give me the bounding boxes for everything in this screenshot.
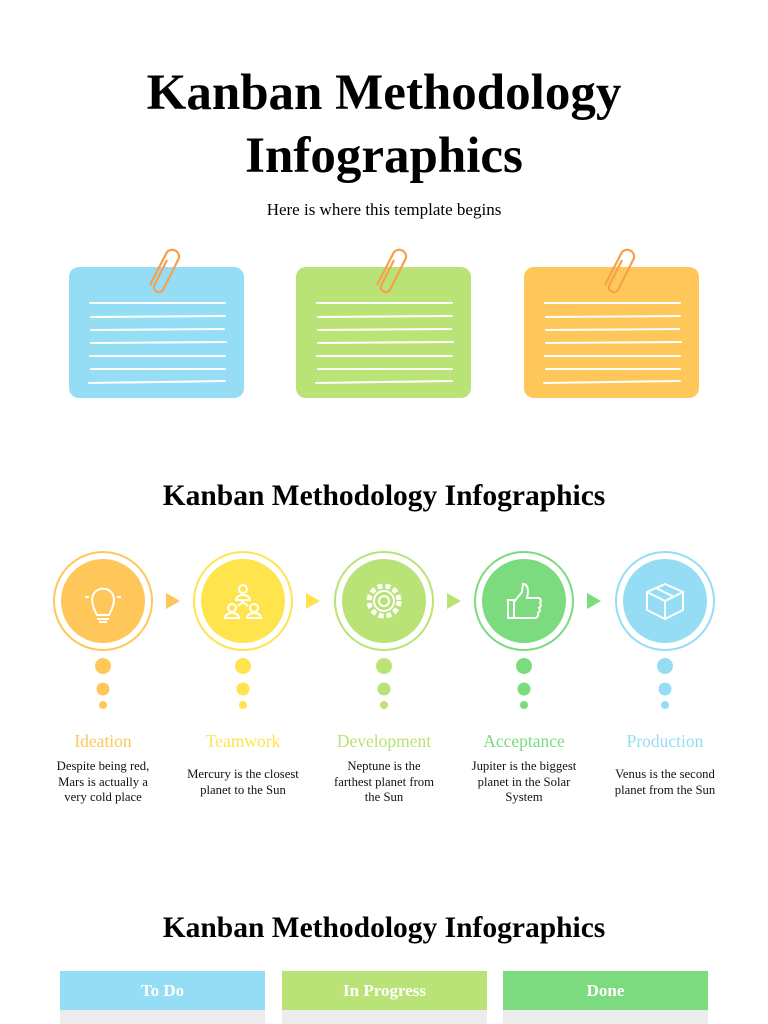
- arrow: [306, 593, 320, 609]
- process diagram: [53, 551, 715, 709]
- arrow: [166, 593, 180, 609]
- note: green: [296, 250, 471, 398]
- text: Development: [337, 731, 431, 751]
- text: System: [505, 790, 543, 804]
- kanban column: in progress: In Progress: [343, 981, 426, 1000]
- section heading 3: Kanban Methodology Infographics: [163, 912, 605, 944]
- sticky notes: [69, 248, 699, 398]
- note: blue: [69, 250, 244, 398]
- step: teamwork: [194, 552, 292, 709]
- kanban column: done: Done: [587, 981, 624, 1000]
- text: the Sun: [365, 790, 403, 804]
- text: planet in the Solar: [478, 774, 570, 788]
- kanban column: to do: To Do: [141, 981, 184, 1000]
- kanban column: in progress: [282, 971, 487, 1010]
- text: Neptune is the: [347, 759, 421, 773]
- title: Kanban Methodology: [147, 65, 621, 121]
- text: Mercury is the closest: [187, 767, 299, 781]
- text: Venus is the second: [615, 767, 715, 781]
- step descriptions: Despite being red,: [57, 759, 149, 773]
- step descriptions: [57, 759, 149, 804]
- kanban column: to do: [60, 971, 265, 1010]
- step labels: Ideation: [74, 731, 132, 751]
- step: production: [616, 552, 714, 709]
- arrow: [587, 593, 601, 609]
- subtitle: Here is where this template begins: [267, 200, 501, 219]
- note: orange: [524, 250, 699, 398]
- arrow: [447, 593, 461, 609]
- text: Production: [627, 731, 703, 751]
- step: ideation: [54, 552, 152, 709]
- title: [147, 65, 621, 184]
- text: farthest planet from: [334, 774, 434, 788]
- step descriptions: Mars is actually a: [58, 774, 148, 788]
- section heading 2: Kanban Methodology Infographics: [163, 480, 605, 512]
- text: planet to the Sun: [200, 782, 286, 796]
- text: Teamwork: [206, 731, 280, 751]
- step: acceptance: [475, 552, 573, 709]
- kanban column: done: [503, 971, 708, 1010]
- step: development: [335, 552, 433, 709]
- text: Acceptance: [483, 731, 565, 751]
- text: planet from the Sun: [615, 782, 715, 796]
- text: Jupiter is the biggest: [472, 759, 576, 773]
- title: Infographics: [245, 128, 523, 184]
- step descriptions: very cold place: [64, 790, 142, 804]
